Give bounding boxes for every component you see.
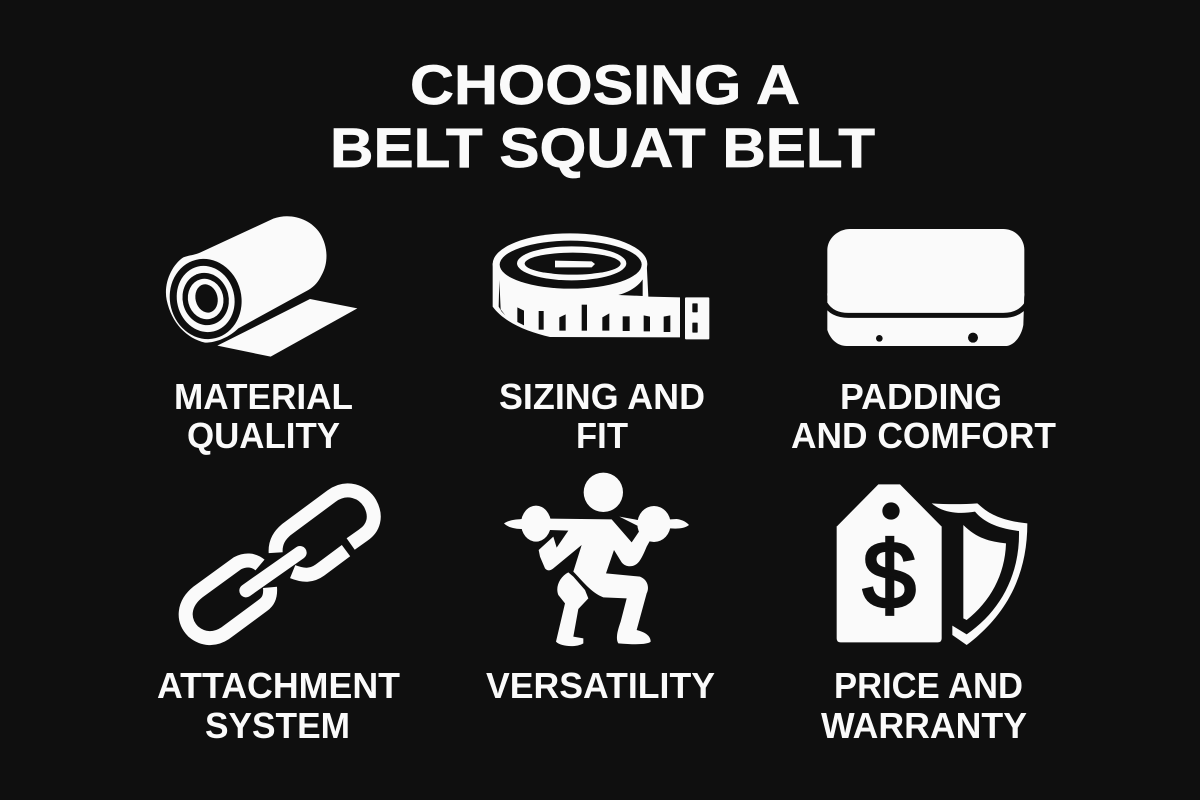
icon: padding cushion	[825, 229, 1027, 346]
title: BELT SQUAT BELT	[330, 116, 875, 179]
panel: sizing and fit	[493, 233, 709, 456]
label: material quality	[174, 376, 353, 456]
icon: chain links	[186, 490, 374, 638]
panel: versatility	[486, 473, 715, 706]
label: attachment system	[157, 665, 400, 746]
label: material quality: QUALITY	[187, 415, 340, 456]
label: price and warranty	[821, 665, 1027, 746]
icon: squatting lifter	[504, 473, 689, 646]
panel: material quality	[161, 216, 357, 456]
panel: attachment system	[157, 490, 400, 746]
title: CHOOSING A	[410, 53, 800, 116]
label: padding and comfort: PADDING	[840, 376, 1002, 417]
title	[330, 53, 875, 179]
label: material quality: MATERIAL	[174, 376, 353, 417]
label: sizing and fit: SIZING AND	[499, 376, 705, 417]
label: price and warranty: WARRANTY	[821, 705, 1027, 746]
label: padding and comfort	[791, 376, 1056, 456]
icon: measuring tape	[493, 233, 709, 339]
icon: price tag and shield: $	[863, 523, 916, 629]
label: versatility: VERSATILITY	[486, 665, 715, 706]
label: price and warranty: PRICE AND	[834, 665, 1023, 706]
label: sizing and fit: FIT	[576, 415, 628, 456]
label: attachment system: SYSTEM	[205, 705, 350, 746]
icon: price tag and shield	[837, 484, 1027, 645]
panel: price and warranty	[821, 484, 1027, 746]
label: sizing and fit	[499, 376, 705, 456]
label: attachment system: ATTACHMENT	[157, 665, 400, 706]
panel: padding and comfort	[791, 229, 1056, 456]
icon: fabric roll	[161, 216, 357, 357]
label: padding and comfort: AND COMFORT	[791, 415, 1056, 456]
